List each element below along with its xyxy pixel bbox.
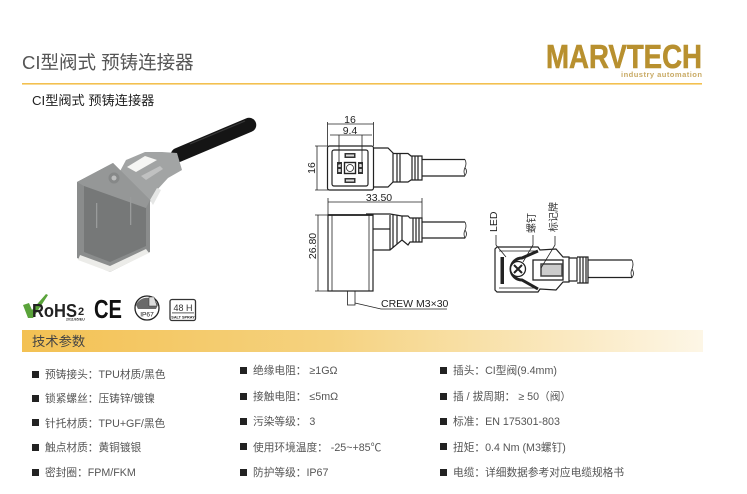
certification: 48H salt spray: SALT SPRAY (171, 316, 195, 320)
spec column 1: 触点材质：黄铜镀银 (45, 441, 142, 454)
technical drawing: side view (328, 214, 466, 305)
spec column 1: 密封圈：FPM/FKM (45, 466, 136, 479)
spec column 3: 插头：CI型阀(9.4mm) (453, 364, 557, 377)
spec column 3: 插 / 拔周期： ≥ 50（阀） (453, 390, 571, 403)
spec column 2: 使用环境温度： -25~+85℃ (253, 441, 382, 454)
spec column 3: 电缆：详细数据参考对应电缆规格书 (453, 466, 624, 479)
spec column 1 (32, 368, 166, 479)
certification: RoHS 2: 2011/65/EU (66, 318, 85, 322)
certification: RoHS 2 (23, 294, 85, 322)
page title: CI型阀式 预铸连接器 (22, 52, 194, 73)
callout: screw M3×30: CREW M3×30 (381, 298, 449, 310)
dimension: 33.50 (328, 192, 422, 218)
certification: 48H salt spray (170, 300, 196, 320)
product photo: connector (77, 121, 249, 272)
dimension: 16 width (328, 114, 374, 146)
subtitle: CI型阀式 预铸连接器 (32, 92, 154, 108)
dimension: 16 width: 16 (344, 114, 356, 126)
callout: 螺钉: 螺钉 (526, 213, 538, 233)
callout: 标记牌 (541, 202, 560, 268)
dimension: 33.50: 33.50 (366, 192, 392, 204)
certification: 48H salt spray: 48 H (173, 303, 193, 313)
certification: CE: CE (94, 294, 122, 324)
spec column 2: 防护等级：IP67 (253, 466, 328, 479)
section header: 技术参数 (22, 330, 703, 352)
spec column 3: 扭矩：0.4 Nm (M3螺钉) (453, 441, 566, 454)
section header: 技术参数: 技术参数 (32, 333, 85, 349)
dimension: 16 height: 16 (306, 162, 318, 174)
dimension: 9.4: 9.4 (343, 125, 357, 137)
technical drawing: top view with LED, screw, label (495, 247, 634, 292)
certification: RoHS 2: 2 (78, 306, 84, 318)
spec column 1: 针托材质：TPU+GF/黑色 (45, 417, 166, 430)
callout: LED (488, 211, 506, 257)
certification: IP67 (135, 296, 159, 320)
logo: MARVTECH: MARVTECH (546, 38, 702, 75)
dimension: 16 height (306, 146, 328, 190)
callout: 螺钉 (523, 213, 538, 262)
spec column 3: 标准：EN 175301-803 (453, 415, 560, 428)
certification: RoHS 2: RoHS (32, 300, 77, 321)
callout: LED: LED (488, 211, 500, 232)
technical drawing: front view (328, 146, 466, 190)
spec column 2: 接触电阻： ≤5mΩ (253, 390, 338, 403)
dimension: 9.4 (330, 125, 372, 165)
logo: MARVTECH: industry automation (621, 70, 702, 79)
dimension: 26.80: 26.80 (307, 233, 319, 259)
spec column 2: 污染等级： 3 (253, 415, 315, 428)
spec column 1: 锁紧螺丝：压铸锌/镀镍 (45, 392, 155, 405)
spec column 2: 绝缘电阻： ≥1GΩ (253, 364, 338, 377)
callout: 标记牌: 标记牌 (547, 202, 560, 232)
certification: IP67: IP67 (140, 312, 154, 318)
spec column 3 (440, 364, 624, 479)
dimension: 26.80 (307, 215, 328, 291)
spec column 1: 预铸接头：TPU材质/黑色 (45, 368, 166, 381)
spec column 2 (240, 364, 382, 479)
